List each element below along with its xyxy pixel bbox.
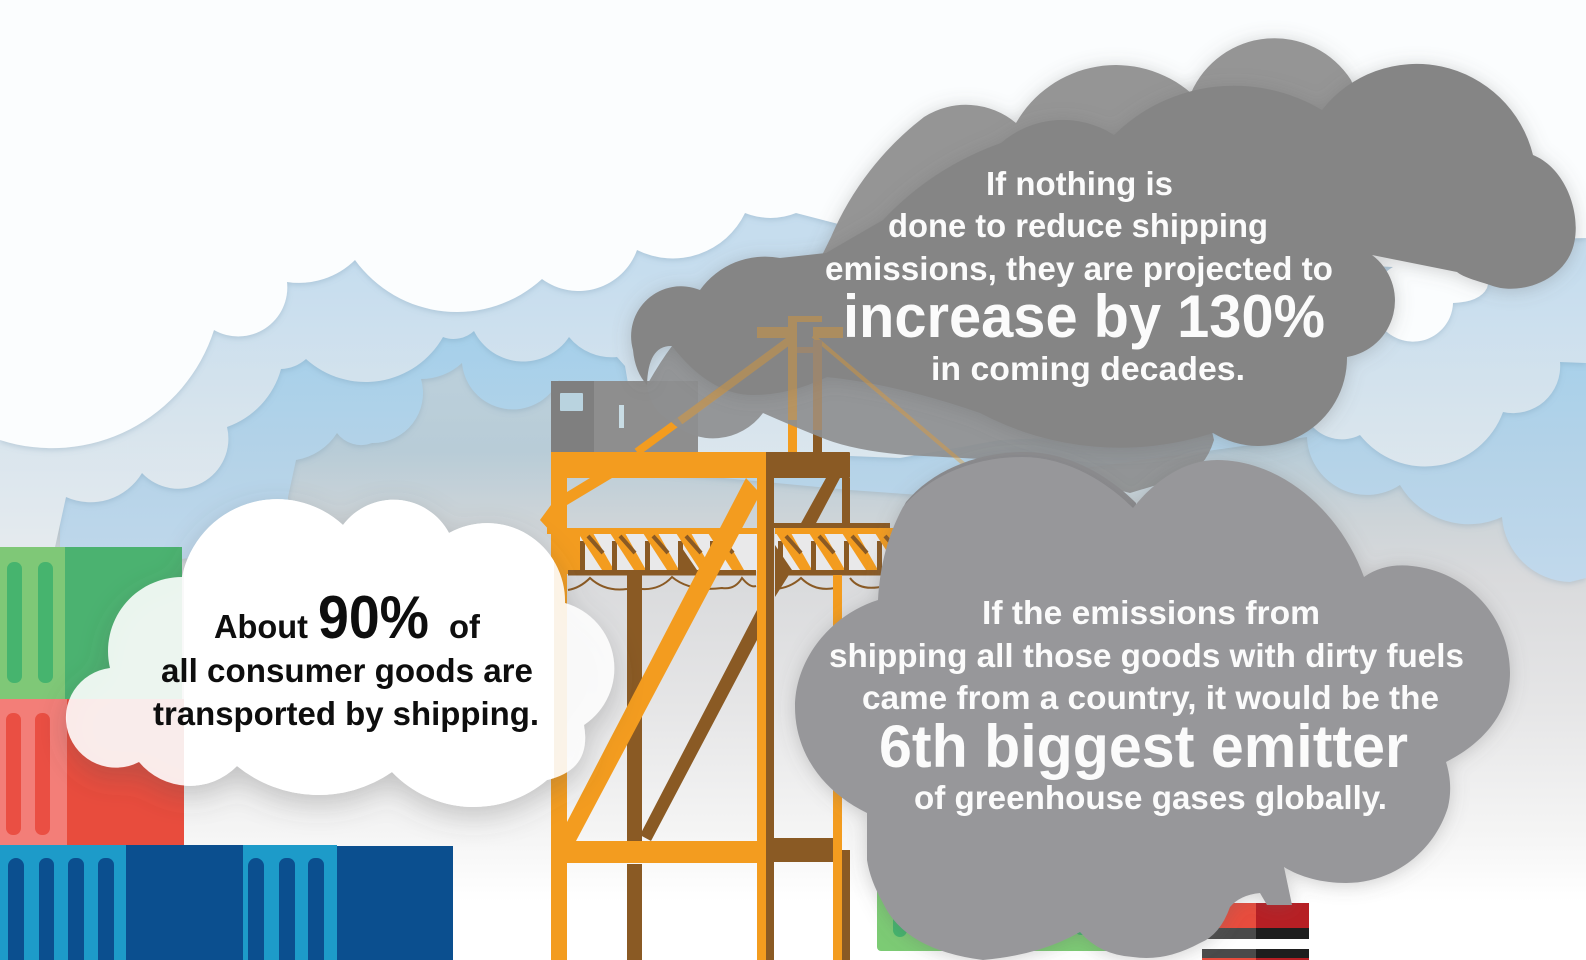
crane truss (547, 523, 911, 597)
crane top seen through smoke (680, 316, 965, 465)
smoke cloud: bottom (795, 452, 1510, 960)
crane frame (540, 452, 850, 960)
sky layer: pale clouds (0, 0, 1586, 570)
text: 90 percent: transported by shipping. (153, 695, 539, 732)
cloud body (66, 499, 614, 807)
smoke cloud: top (631, 38, 1576, 493)
text: increase by 130 percent: If nothing is (986, 165, 1173, 202)
container stack (0, 547, 453, 960)
smoke front layer (631, 64, 1576, 448)
text: 90 percent: 90% (318, 584, 429, 651)
container: blue right (243, 845, 453, 960)
crane cab (551, 381, 698, 452)
container: red (0, 699, 184, 845)
ship hull (877, 880, 1157, 951)
crane mast and stays (637, 316, 822, 452)
cloud opaque centre (184, 499, 554, 807)
ship funnel (1202, 903, 1309, 960)
text: 6th biggest emitter: came from a country, it would be the (862, 679, 1439, 716)
text: 90 percent: all consumer goods are (161, 652, 533, 689)
smoke rim (881, 452, 1136, 635)
container: green (0, 547, 182, 699)
container: blue left (0, 845, 243, 960)
crane legs and braces (567, 452, 850, 960)
sky layer: white top cloud (0, 0, 1586, 448)
text: increase by 130 percent (825, 165, 1333, 387)
text: increase by 130 percent: done to reduce shipping (888, 207, 1268, 244)
text: increase by 130 percent: in coming decades. (931, 350, 1245, 387)
smoke body (795, 457, 1510, 960)
crane (540, 316, 911, 960)
white cloud (66, 499, 614, 807)
text: 6th biggest emitter: shipping all those goods with dirty fuels (829, 637, 1464, 674)
smoke rear layer (800, 38, 1400, 400)
text: 90 percent: About (214, 608, 308, 645)
sky layer: blue clouds (0, 0, 1586, 582)
text: 6th biggest emitter: 6th biggest emitter (879, 713, 1408, 780)
text: increase by 130 percent: emissions, they are projected to (825, 250, 1333, 287)
text: 90 percent: of (449, 608, 481, 645)
smoke lower layer (647, 300, 1214, 493)
text: 6th biggest emitter (829, 594, 1464, 816)
text: 6th biggest emitter: If the emissions from (982, 594, 1320, 631)
text: increase by 130 percent: increase by 130% (843, 283, 1325, 350)
text: 6th biggest emitter: of greenhouse gases globally. (914, 779, 1387, 816)
text: 90 percent (153, 584, 539, 732)
